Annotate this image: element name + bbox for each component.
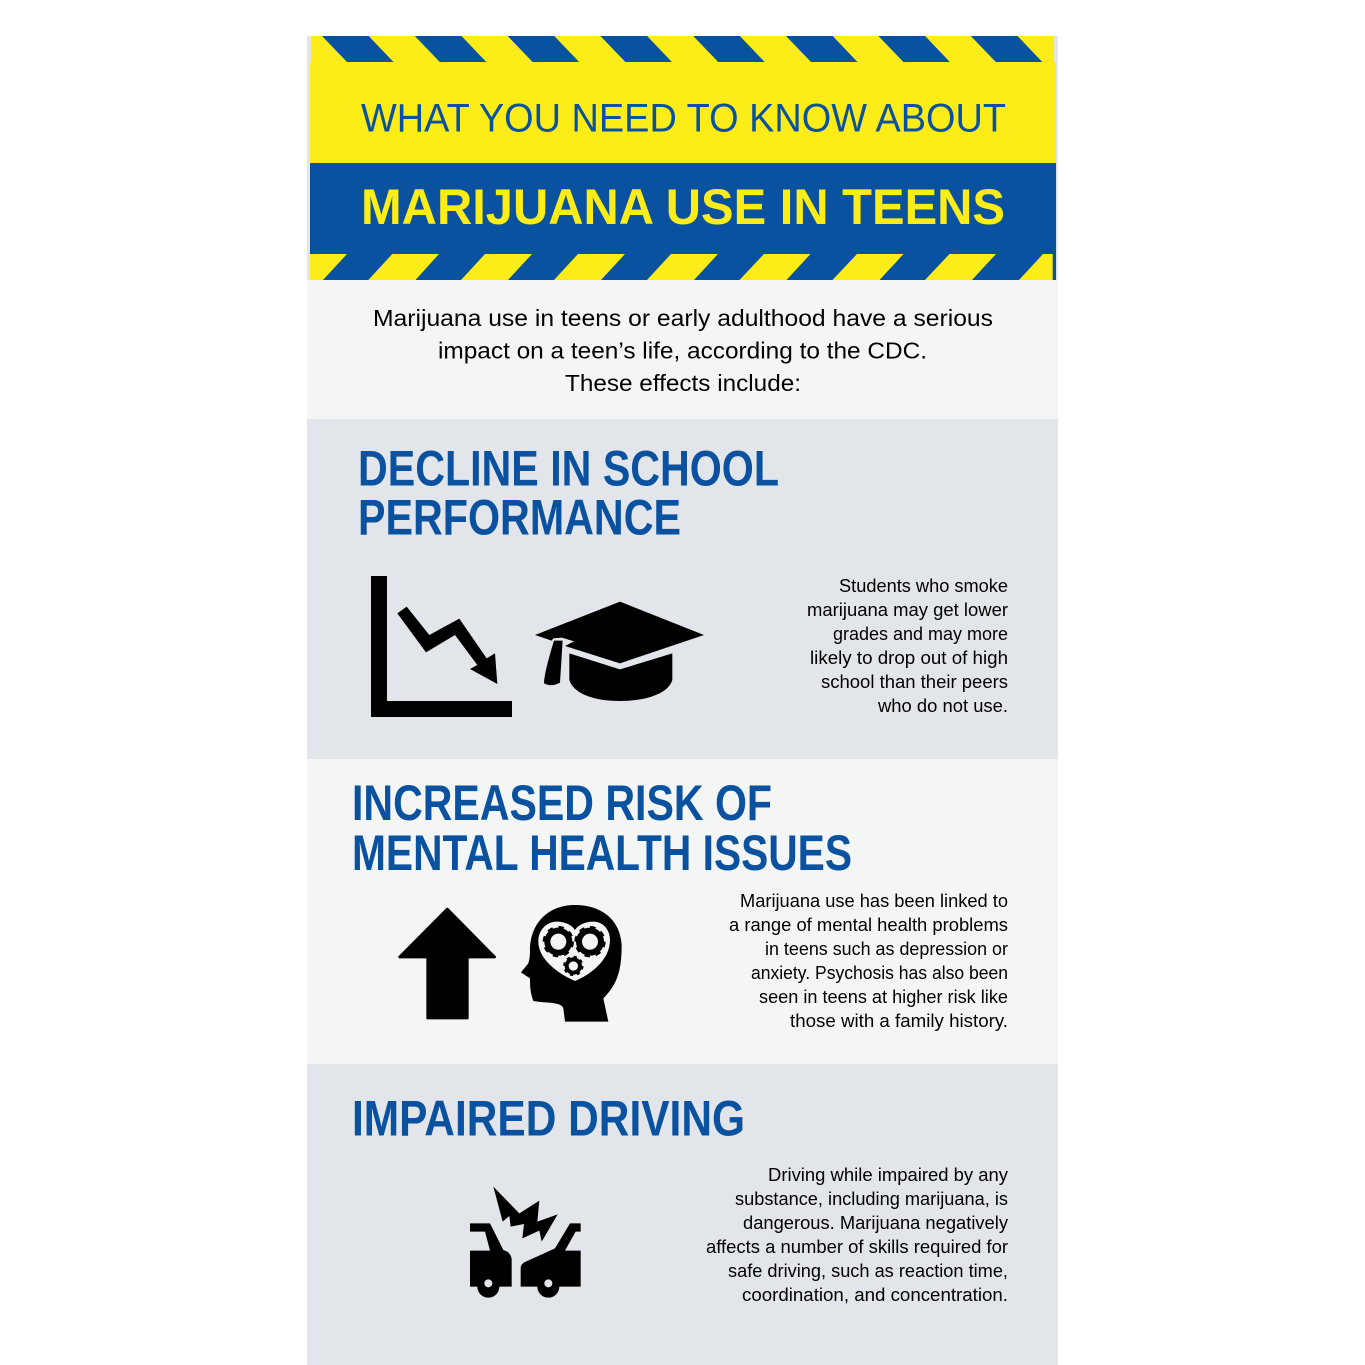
intro text <box>373 305 993 396</box>
body text <box>807 576 1008 716</box>
icon: declining chart <box>371 576 512 717</box>
body text: grades and may more <box>833 624 1008 644</box>
panel: impaired driving <box>307 1064 1058 1365</box>
bottom hazard stripes <box>310 254 1053 280</box>
body text: Driving while impaired by any <box>768 1165 1008 1185</box>
body text: Marijuana use has been linked to <box>740 891 1008 911</box>
title line 1: WHAT YOU NEED TO KNOW ABOUT <box>361 96 1006 140</box>
body text: coordination, and concentration. <box>742 1285 1008 1305</box>
panel: decline in school performance <box>307 419 1058 759</box>
header banner <box>310 36 1056 280</box>
body text: likely to drop out of high <box>810 648 1008 668</box>
body text: a range of mental health problems <box>729 915 1008 935</box>
body text: who do not use. <box>877 696 1008 716</box>
heading: IMPAIRED DRIVING <box>352 1090 745 1146</box>
panel: mental health <box>307 759 1058 1064</box>
intro text: Marijuana use in teens or early adulthood have a serious <box>373 305 993 331</box>
body text: marijuana may get lower <box>807 600 1008 620</box>
body text: Students who smoke <box>839 576 1008 596</box>
heading <box>358 440 779 546</box>
body text: school than their peers <box>821 672 1008 692</box>
heading: MENTAL HEALTH ISSUES <box>352 825 852 881</box>
intro text: These effects include: <box>565 370 801 396</box>
body text <box>706 1165 1008 1305</box>
panel: intro <box>307 280 1058 419</box>
icon: up arrow <box>400 909 495 1018</box>
top hazard stripes <box>311 36 1054 63</box>
body text: substance, including marijuana, is <box>735 1189 1008 1209</box>
body text: anxiety. Psychosis has also been <box>751 963 1008 983</box>
body text: dangerous. Marijuana negatively <box>743 1213 1008 1233</box>
body text: safe driving, such as reaction time, <box>728 1261 1008 1281</box>
intro text: impact on a teen’s life, according to the CDC. <box>438 338 927 364</box>
icon: graduation cap <box>535 602 704 701</box>
body text: those with a family history. <box>790 1011 1008 1031</box>
heading: DECLINE IN SCHOOL <box>358 440 779 496</box>
title line 2: MARIJUANA USE IN TEENS <box>361 179 1005 235</box>
icon: car crash <box>470 1187 581 1298</box>
body text: affects a number of skills required for <box>706 1237 1008 1257</box>
heading: PERFORMANCE <box>358 490 681 546</box>
heading: INCREASED RISK OF <box>352 775 772 831</box>
blue title band <box>310 163 1056 280</box>
icon: head with heart and gears <box>521 905 622 1022</box>
body text <box>729 891 1008 1031</box>
body text: in teens such as depression or <box>765 939 1008 959</box>
heading <box>352 775 852 881</box>
yellow title band <box>310 62 1056 163</box>
body text: seen in teens at higher risk like <box>759 987 1008 1007</box>
